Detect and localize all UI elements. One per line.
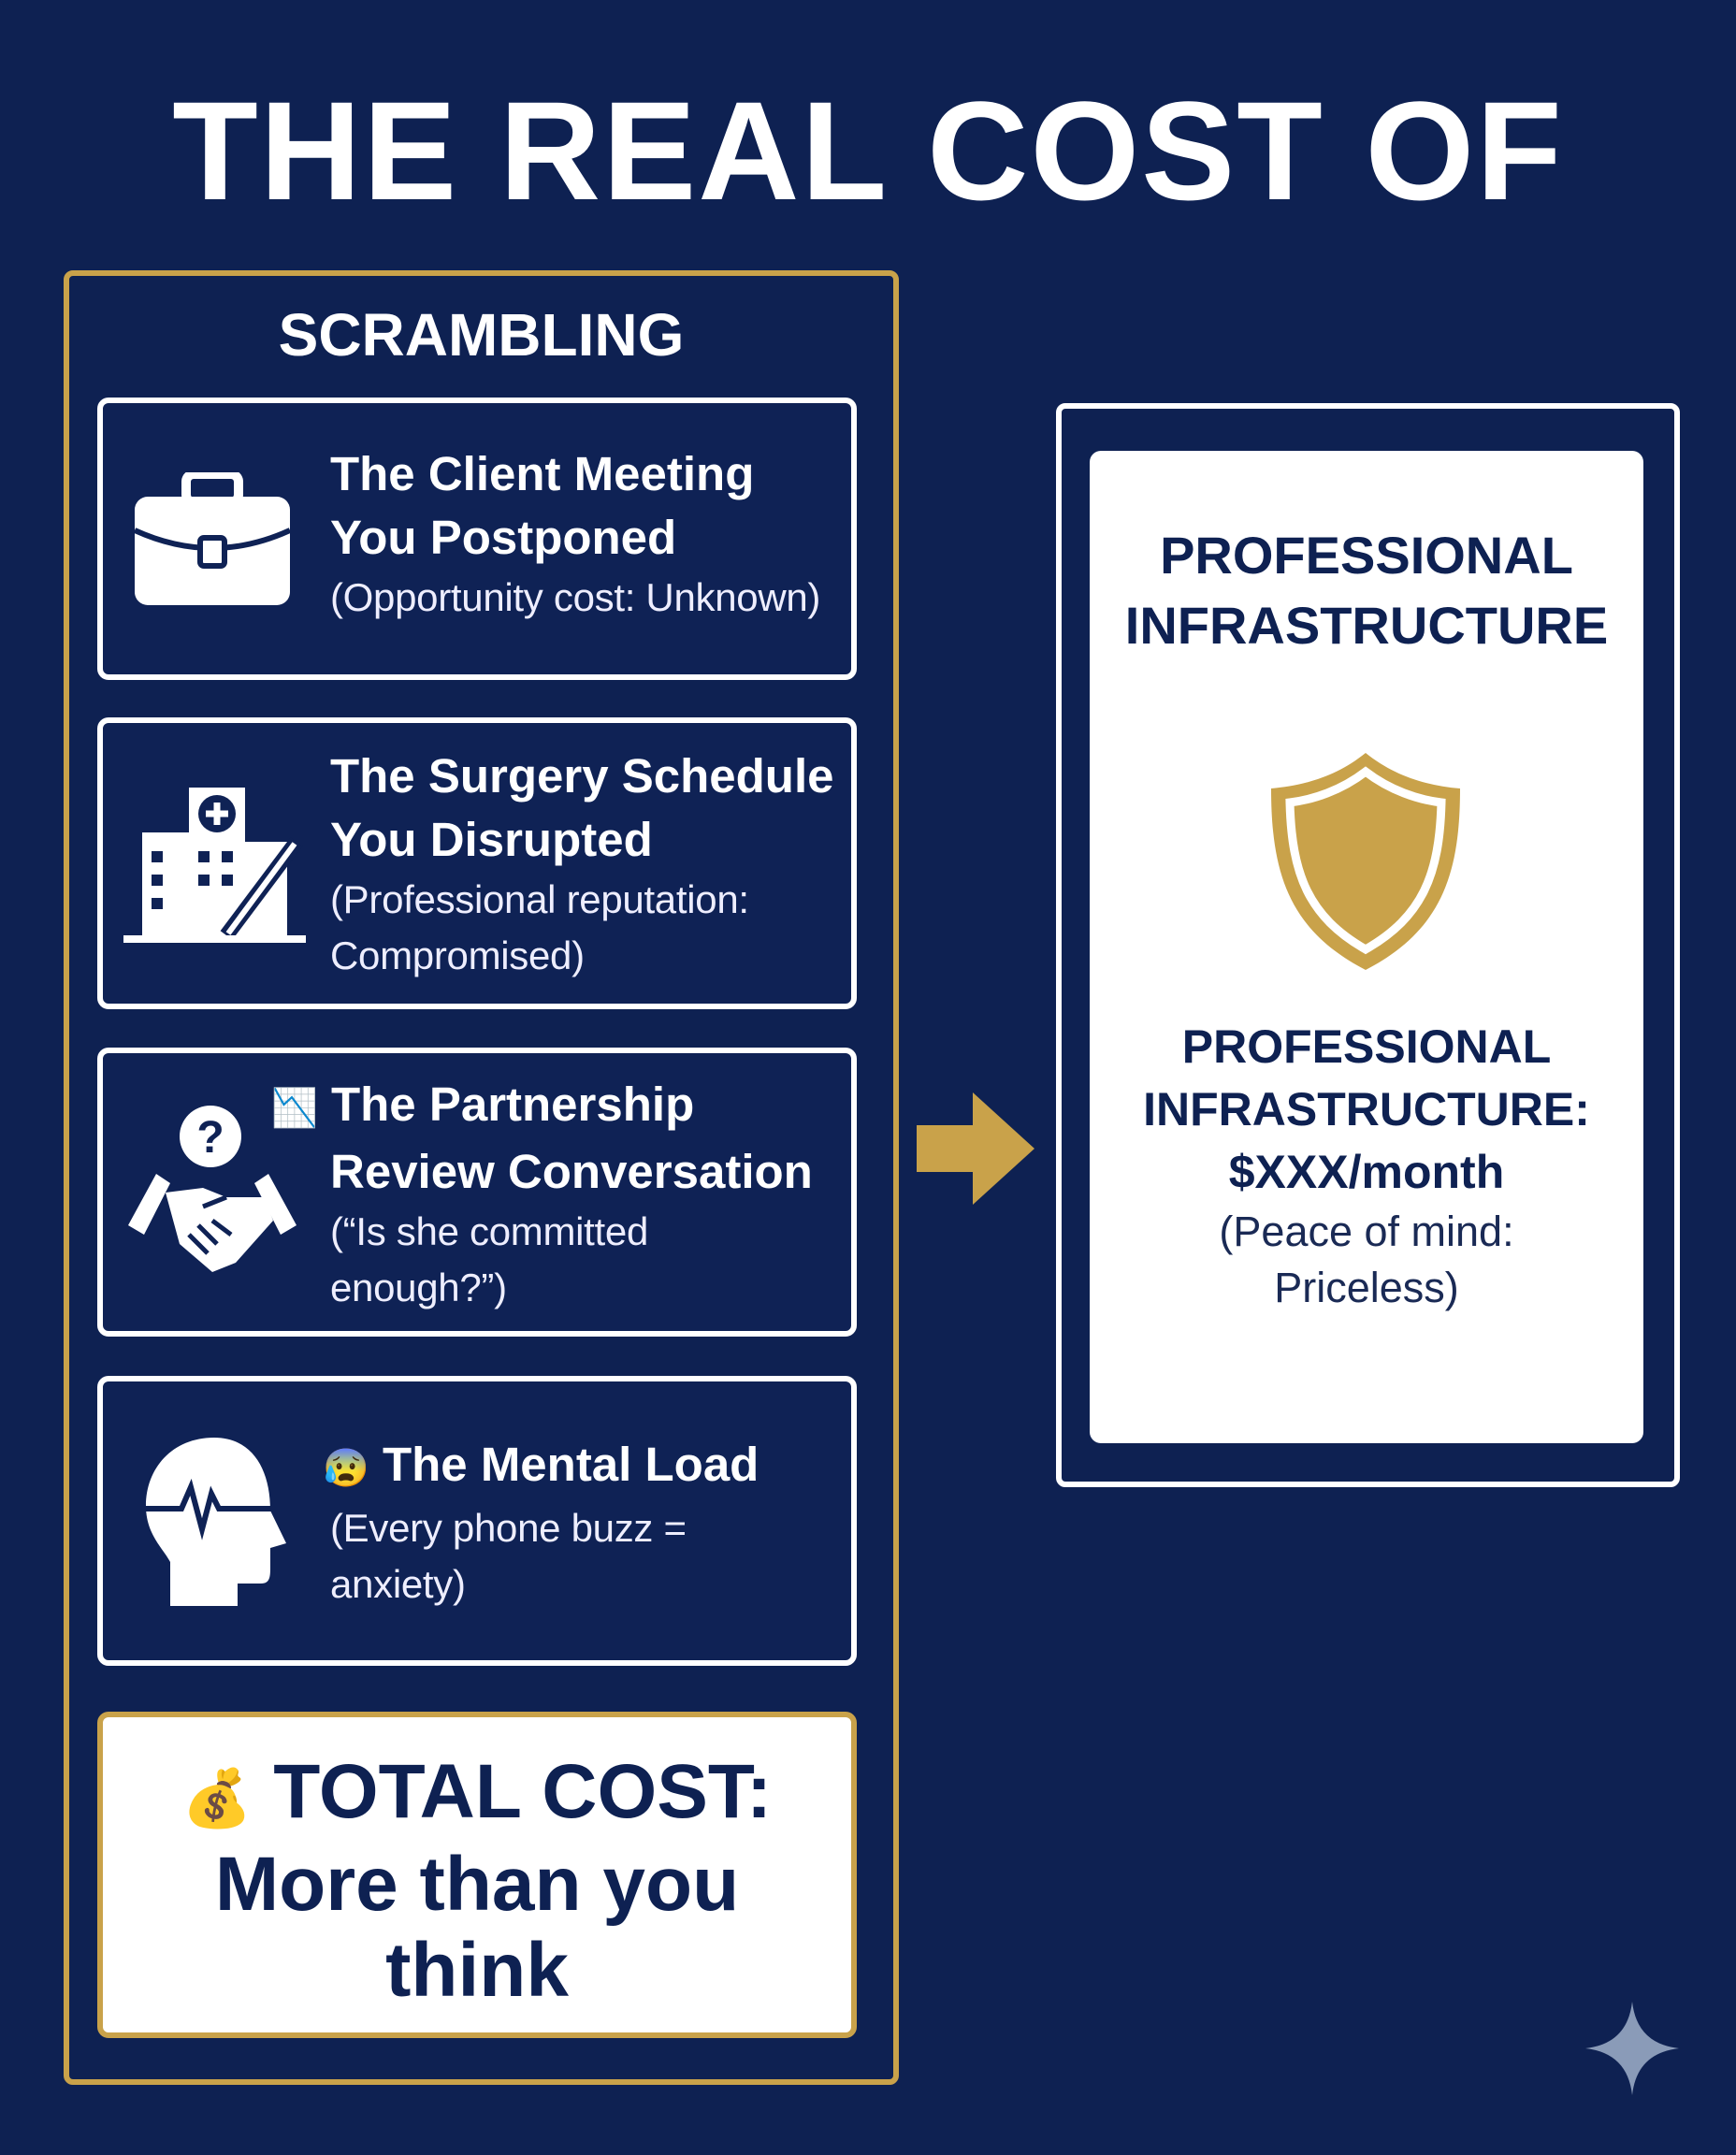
text: price <box>1143 1020 1590 1311</box>
text: mental load <box>323 1438 759 1606</box>
text: price: PROFESSIONAL <box>1182 1020 1551 1073</box>
heading: scrambling: SCRAMBLING <box>279 301 684 369</box>
text: client meeting: (Opportunity cost: Unknown) <box>330 575 820 619</box>
text: client meeting <box>330 447 820 619</box>
callout: total cost: think <box>385 1928 569 2013</box>
text: surgery: (Professional reputation: <box>330 877 749 921</box>
icon: handshake <box>128 1106 297 1272</box>
heading: professional infrastructure: INFRASTRUCTURE <box>1125 596 1608 655</box>
text: price: $XXX/month <box>1229 1146 1504 1198</box>
text: partnership: enough?”) <box>330 1266 507 1309</box>
text: price: (Peace of mind: <box>1219 1208 1514 1255</box>
icon: briefcase <box>135 472 290 605</box>
text: mental load: anxiety) <box>330 1562 466 1606</box>
text: mental load: (Every phone buzz = <box>330 1506 687 1550</box>
text: mental load: 😰 The Mental Load <box>323 1438 759 1491</box>
text: price: INFRASTRUCTURE: <box>1143 1083 1590 1135</box>
text: surgery: The Surgery Schedule <box>330 749 834 803</box>
card: partnership <box>97 1048 857 1337</box>
heading: professional infrastructure <box>1125 526 1608 655</box>
text: price: Priceless) <box>1274 1264 1459 1311</box>
title: THE REAL COST OF <box>172 72 1564 229</box>
panel: scrambling <box>64 270 899 2085</box>
arrow <box>917 1092 1034 1205</box>
text: partnership: (“Is she committed <box>330 1209 648 1253</box>
inner white card <box>1090 451 1643 1443</box>
text: partnership: Review Conversation <box>330 1145 813 1198</box>
icon: sparkle <box>1586 2002 1679 2095</box>
icon: handshake: ? <box>196 1113 224 1163</box>
text: partnership <box>271 1078 813 1309</box>
text: surgery: Compromised) <box>330 933 585 977</box>
icon: shield <box>1271 753 1460 970</box>
text: surgery: You Disrupted <box>330 813 653 866</box>
card: client meeting <box>97 398 857 680</box>
text: surgery <box>330 749 834 977</box>
text: client meeting: The Client Meeting <box>330 447 754 500</box>
text: partnership: 📉 The Partnership <box>271 1078 694 1131</box>
callout: total cost <box>97 1712 857 2038</box>
callout: total cost: 💰 TOTAL COST: <box>182 1749 772 1834</box>
panel: professional infrastructure <box>1056 403 1680 1487</box>
heading: professional infrastructure: PROFESSIONAL <box>1160 526 1573 585</box>
callout: total cost: More than you <box>215 1842 739 1927</box>
card: surgery <box>97 717 857 1009</box>
text: client meeting: You Postponed <box>330 511 676 564</box>
card: mental load <box>97 1376 857 1666</box>
icon: head <box>146 1438 286 1606</box>
icon: hospital <box>123 788 306 943</box>
